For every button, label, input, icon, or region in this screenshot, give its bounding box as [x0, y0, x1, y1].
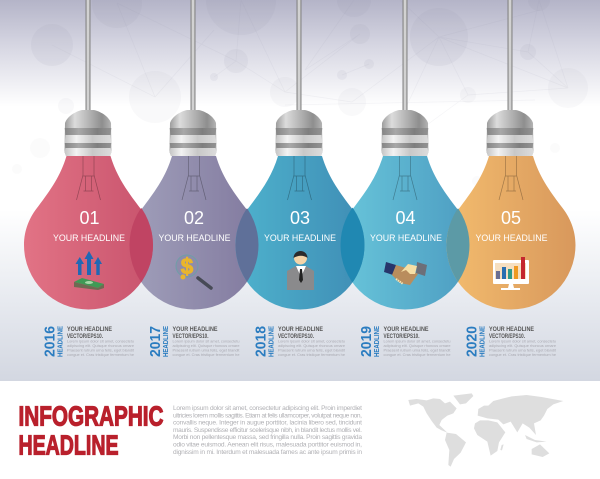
number 04: 04: [395, 208, 416, 228]
description paragraph: mauris. Suspendisse efficitur scelerisque nibh, in blandit lectus mollis vel.: [173, 427, 362, 434]
item text 3: congue et. Cras tristique fermentum he: [278, 353, 345, 357]
vertical label 3: HEADLINE: [266, 326, 276, 357]
item text 1: Lorem ipsum dolor sit amet, consectetu: [67, 340, 134, 344]
item subheading 4: VECTOR/EPS10.: [384, 334, 420, 340]
item text 3: adipiscing elit. Quisque rhoncus ornare: [278, 344, 345, 348]
item heading 3: YOUR HEADLINE: [278, 326, 324, 333]
item text 1: congue et. Cras tristique fermentum he: [67, 353, 134, 357]
description paragraph: dignissim in mi. Interdum et malesuada fames ac ante ipsum primis in: [173, 449, 362, 456]
background panel: [0, 0, 600, 381]
item subheading 3: VECTOR/EPS10.: [278, 334, 314, 340]
icon: magnifier with dollar: $: [181, 254, 193, 279]
headline 1: YOUR HEADLINE: [53, 233, 125, 244]
item text 2: [172, 340, 240, 357]
bulb 5: [446, 0, 576, 310]
item subheading 1: VECTOR/EPS10.: [67, 334, 103, 340]
item heading 5: YOUR HEADLINE: [489, 326, 535, 333]
number 03: 03: [290, 208, 310, 228]
icon: arrows and money: [74, 251, 104, 290]
item text 2: adipiscing elit. Quisque rhoncus ornare: [172, 344, 240, 348]
vertical label 2: HEADLINE: [161, 326, 170, 357]
icon: handshake: [384, 262, 427, 285]
number 05: 05: [501, 208, 521, 228]
timeline item 2020: [464, 326, 556, 357]
item text 3: Lorem ipsum dolor sit amet, consectetu: [278, 340, 345, 344]
icon: monitor chart: [493, 257, 529, 290]
headline 2: YOUR HEADLINE: [158, 233, 230, 244]
year 2019: 2019: [358, 326, 375, 357]
item text 4: congue et. Cras tristique fermentum he: [384, 353, 450, 357]
description paragraph: ultricies lorem mollis sagittis. Etiam at felis ullamcorper, volutpat neque non,: [173, 412, 362, 419]
item heading 4: YOUR HEADLINE: [384, 326, 429, 333]
item text 5: [489, 340, 556, 357]
icon: businessman: [287, 251, 314, 290]
headline 4: YOUR HEADLINE: [370, 233, 442, 244]
item text 3: [278, 340, 345, 357]
bulb 1: [24, 0, 153, 310]
overlap 2-3: [236, 208, 258, 282]
item heading 1: YOUR HEADLINE: [67, 326, 113, 333]
item text 4: Lorem ipsum dolor sit amet, consectetu: [384, 340, 451, 344]
item subheading 2: VECTOR/EPS10.: [172, 334, 209, 340]
item subheading 5: VECTOR/EPS10.: [489, 334, 525, 340]
item text 4: [384, 340, 451, 357]
year 2017: 2017: [147, 326, 164, 357]
main title: INFOGRAPHIC: [18, 400, 164, 432]
item text 4: adipiscing elit. Quisque rhoncus ornare: [384, 344, 450, 348]
year 2020: 2020: [464, 326, 480, 357]
description paragraph: Morbi non pellentesque massa, sed fringilla nulla. Proin sagittis gravida: [173, 434, 362, 441]
description paragraph: convallis neque. Integer in augue porttitor, lacinia libero sed, tincidunt: [173, 420, 362, 427]
item text 2: Lorem ipsum dolor sit amet, consectetu: [172, 340, 240, 344]
main title: HEADLINE: [18, 430, 118, 460]
timeline item 2017: [147, 326, 240, 357]
main title: [18, 400, 164, 460]
overlap 1-2: [130, 208, 153, 282]
timeline item 2016: [42, 326, 134, 357]
vertical label 1: HEADLINE: [56, 326, 64, 357]
description paragraph: [173, 405, 362, 456]
timeline item 2019: [358, 326, 451, 357]
item text 2: Praesent rutrum urna felis, eget blandit: [172, 348, 240, 352]
bulb 4: [340, 0, 470, 310]
item text 1: [67, 340, 134, 357]
headline 3: YOUR HEADLINE: [264, 233, 336, 244]
item text 1: Praesent rutrum urna felis, eget blandit: [67, 348, 134, 352]
description paragraph: Lorem ipsum dolor sit amet, consectetur adipiscing elit. Proin imperdiet: [173, 405, 362, 412]
item text 5: congue et. Cras tristique fermentum he: [489, 353, 556, 357]
vertical label 5: HEADLINE: [478, 326, 486, 357]
number 01: 01: [79, 208, 100, 228]
year 2018: 2018: [252, 326, 270, 357]
timeline item 2018: [252, 326, 345, 357]
year 2016: 2016: [42, 326, 58, 357]
item text 1: adipiscing elit. Quisque rhoncus ornare: [67, 344, 134, 348]
network pattern background: [12, 0, 588, 186]
overlap 4-5: [446, 208, 470, 282]
bulb 2: [130, 0, 258, 310]
item text 5: Lorem ipsum dolor sit amet, consectetu: [489, 340, 556, 344]
item text 5: adipiscing elit. Quisque rhoncus ornare: [489, 344, 556, 348]
description paragraph: odio vitae euismod. Aenean elit risus, malesuada porttitor euismod in,: [173, 442, 362, 448]
overlap 3-4: [340, 208, 364, 282]
icon: magnifier with dollar: [176, 254, 211, 288]
world map: [408, 393, 563, 467]
item text 5: Praesent rutrum urna felis, eget blandit: [489, 348, 556, 352]
item text 2: congue et. Cras tristique fermentum he: [172, 353, 240, 357]
headline 5: YOUR HEADLINE: [476, 233, 548, 244]
number 02: 02: [184, 208, 204, 228]
item text 3: Praesent rutrum urna felis, eget blandit: [278, 348, 345, 352]
vertical label 4: HEADLINE: [372, 326, 381, 357]
bulb 3: [236, 0, 364, 310]
item heading 2: YOUR HEADLINE: [172, 326, 218, 333]
item text 4: Praesent rutrum urna felis, eget blandit: [384, 348, 450, 352]
